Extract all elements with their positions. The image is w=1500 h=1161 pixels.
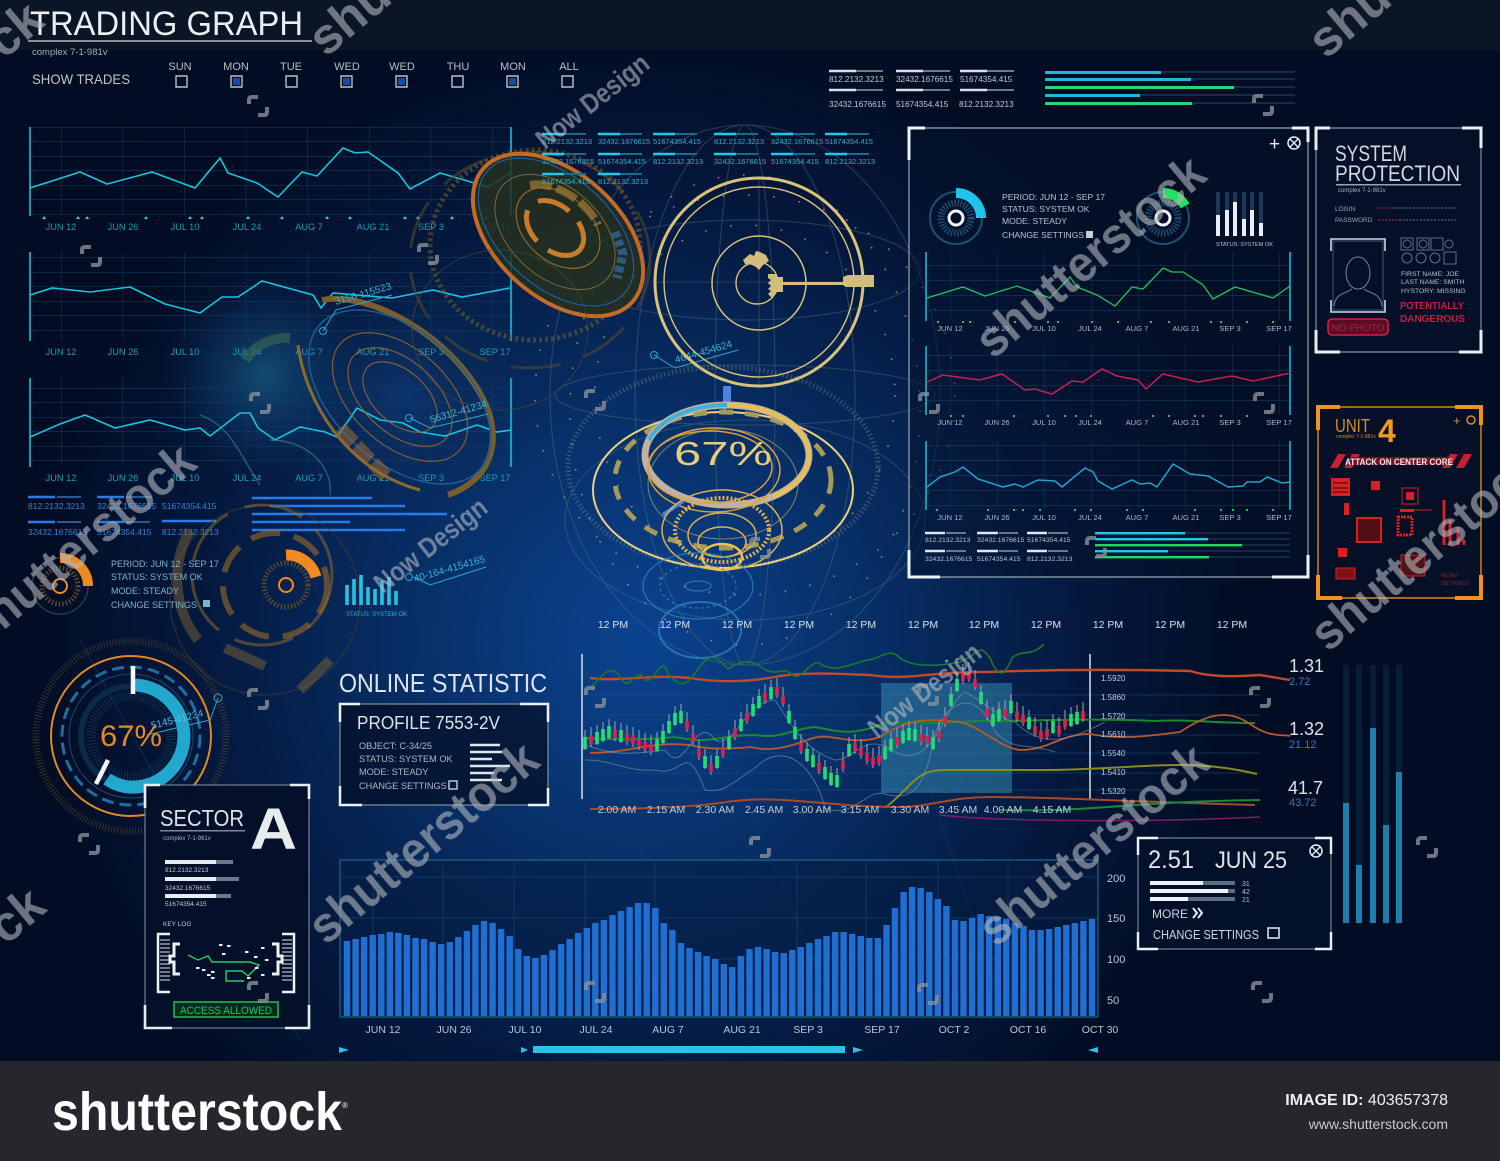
close icon [1310,845,1322,857]
date axis: JUN 12 [365,1024,401,1036]
heading [1335,141,1461,194]
red chart: JUL 10 [1032,418,1056,427]
attack banner: ATTACK ON CENTER CORE [1345,457,1453,467]
data block row: 812.2132.3213 [653,157,703,166]
reset settings: RESET [1441,573,1460,579]
profile panel: CHANGE SETTINGS [359,781,447,791]
sector bars: 51674354.415 [165,901,207,908]
line chart 2: JUN 12 [46,347,76,357]
callout labels over rings: 40-164-4154165 [413,554,487,585]
day checkboxes [168,61,579,87]
panel gauge right [1137,192,1189,244]
line chart 3: JUN 26 [108,473,138,483]
identity text: LAST NAME: SMITH [1401,279,1464,286]
moving averages [585,644,1290,821]
price labels: 1.5610 [1101,730,1126,739]
date axis: JUN 26 [436,1024,472,1036]
top right data block: 32432.1676615 [896,75,953,84]
panel status text: MODE: STEADY [1002,216,1067,226]
lower left data block: 32432.1676615 [97,501,156,511]
lower left data block: 812.2132.3213 [162,527,219,537]
time labels: 2.45 AM [745,804,783,816]
line chart 1: SEP 3 [418,222,444,232]
blue chart: AUG 21 [1172,513,1200,522]
price labels: 1.5920 [1101,674,1126,683]
right monitor panel [909,128,1308,577]
line chart 2: JUL 10 [171,347,199,357]
now design watermarks [368,47,987,744]
panel data block [925,533,1073,563]
callout labels over rings: 3156-115523 [334,281,393,308]
date axis [365,1024,1118,1036]
identity text: HYSTORY: MISSING [1401,288,1466,295]
time labels: 3.30 AM [891,804,929,816]
orange gauge left [32,558,88,614]
top right bars [1045,71,1295,105]
green candles [585,679,1077,787]
value axis [1107,873,1125,1007]
data block row: 812.2132.3213 [542,137,592,146]
red chart [926,346,1292,427]
date axis: OCT 2 [939,1024,970,1036]
blue chart: SEP 3 [1219,513,1241,522]
12 PM time axis: 12 PM [722,619,752,631]
panel mini bars [1216,192,1273,248]
line chart 2: AUG 21 [357,347,389,357]
now design watermarks: Now Design [862,636,987,744]
danger text: DANGEROUS [1400,313,1465,325]
red chart: SEP 17 [1266,418,1292,427]
now design watermarks: Now Design [530,47,655,155]
status text left: MODE: STEADY [111,586,179,596]
unit heading [1335,413,1475,449]
panel data block: 812.2132.3213 [1027,556,1073,563]
line chart 1: JUL 24 [233,222,261,232]
day checkboxes: MON [500,61,526,73]
time labels: 4.00 AM [984,804,1022,816]
vertical bars [1346,665,1399,923]
panel close icons: + [1269,134,1280,155]
attack banner [1330,454,1472,468]
line chart 1: JUL 10 [171,222,199,232]
heading: SYSTEM [1335,141,1407,166]
footer bar: ® [342,1101,348,1110]
panel data block: 51674354.415 [1027,537,1071,544]
data block row: 32432.1676615 [714,157,766,166]
no photo badge: NO PHOTO [1331,323,1385,334]
12 PM time axis: 12 PM [846,619,876,631]
green chart: JUL 10 [1032,324,1056,333]
red chart: AUG 21 [1172,418,1200,427]
unit 4 panel [1318,407,1481,598]
green chart: SEP 3 [1219,324,1241,333]
top right data block: 812.2132.3213 [959,100,1014,109]
day checkboxes: TUE [280,61,302,73]
day checkboxes: SUN [168,61,192,73]
line chart 1: SEP 17 [480,222,510,232]
line chart 1: JUN 12 [46,222,76,232]
sector bars: 812.2132.3213 [165,867,209,874]
day checkboxes: ALL [559,61,579,73]
glow behind radar rings [160,265,530,525]
red chart: JUN 12 [937,418,963,427]
date axis: JUL 24 [580,1024,613,1036]
panel bars [1095,532,1290,558]
line chart 1: AUG 7 [295,222,323,232]
sector heading: complex 7-1-981v [163,836,211,842]
icon grid [1401,238,1456,264]
unit heading: + [1453,413,1461,428]
time labels: 3.15 AM [841,804,879,816]
day checkboxes: THU [447,61,469,73]
mini bars status [346,575,407,618]
line chart 3: SEP 3 [418,473,444,483]
reflected ghost discs [643,553,753,658]
date panel: CHANGE SETTINGS [1153,928,1259,942]
date panel: MORE [1152,907,1188,921]
data block row: 51674354.415 [542,177,590,186]
data block row: 32432.1676615 [598,137,650,146]
red chart: JUL 24 [1078,418,1102,427]
line chart 2: SEP 3 [418,347,444,357]
12 PM time axis: 12 PM [598,619,628,631]
date axis: AUG 21 [723,1024,761,1036]
time labels: 3.00 AM [793,804,831,816]
data block row: 32432.1676615 [542,157,594,166]
panel data block: 51674354.415 [977,556,1021,563]
title: SHOW TRADES [32,71,130,87]
sector bars [163,860,239,928]
readouts [1288,656,1324,809]
mini bars status: STATUS: SYSTEM OK [346,612,407,618]
profile panel: OBJECT: C-34/25 [359,741,432,751]
line chart 3: AUG 21 [357,473,389,483]
readouts: 1.32 [1289,719,1324,739]
system protection panel [1316,128,1481,352]
mini progress: 31 [1242,881,1250,888]
big orange gauge [36,641,226,831]
danger text: POTENTIALLY [1400,300,1464,312]
identity text [1401,271,1466,295]
date axis: SEP 17 [864,1024,900,1036]
callout labels over rings: 56312-41234 [429,399,489,426]
date axis: OCT 30 [1082,1024,1118,1036]
identity text: FIRST NAME: JOE [1401,271,1459,278]
line chart 3: JUL 10 [171,473,199,483]
lower left data block: 32432.1676615 [28,527,87,537]
12 PM time axis: 12 PM [1217,619,1247,631]
price labels: 1.5320 [1101,787,1126,796]
readouts: 21.12 [1289,739,1317,751]
photo frame [1331,239,1385,312]
data block row: 51674354.415 [825,137,873,146]
value axis: 150 [1107,913,1125,925]
data block row: 32432.1676615 [771,137,823,146]
red chart: AUG 7 [1126,418,1148,427]
sector bars: KEY LOG [163,921,191,928]
data block row: 51674354.415 [598,157,646,166]
time labels: 3.45 AM [939,804,977,816]
unit heading: 4 [1378,413,1396,449]
status text left: CHANGE SETTINGS [111,600,197,610]
date panel [1138,838,1331,949]
status text left [111,559,219,610]
callout labels over rings [320,281,738,585]
green chart: JUN 12 [937,324,963,333]
readouts: 2.72 [1289,676,1310,688]
panel status text [1002,192,1105,240]
wicks [585,662,1083,788]
status text left: PERIOD: JUN 12 - SEP 17 [111,559,219,569]
day checkboxes: WED [389,61,415,73]
reset settings [1441,573,1469,587]
line chart 2 [30,252,512,357]
value axis: 200 [1107,873,1125,885]
orange radar ring middle [200,250,588,518]
top right data block: 51674354.415 [896,100,949,109]
date axis: SEP 3 [793,1024,823,1036]
callout labels over rings: 4644-454624 [674,339,734,366]
now design watermarks: Now Design [368,491,493,599]
watermark reticles [80,96,1436,1003]
line chart 3 [30,378,512,483]
blue chart: SEP 17 [1266,513,1292,522]
readouts: 41.7 [1288,778,1323,798]
sector heading [160,797,297,862]
login fields: PASSWORD [1335,217,1373,224]
gauge callout: 5145-41234 [150,708,205,732]
price labels: 1.5720 [1101,712,1126,721]
online statistic heading: ONLINE STATISTIC [339,668,547,698]
data block row: 812.2132.3213 [598,177,648,186]
lower left data block [28,497,219,537]
sector A panel [145,785,309,1028]
day checkboxes: WED [334,61,360,73]
line chart 1 [30,127,512,232]
12 PM time axis: 12 PM [1093,619,1123,631]
gauge percentage: 67% [100,720,162,753]
green chart: SEP 17 [1266,324,1292,333]
day checkboxes: MON [223,61,249,73]
green chart: AUG 7 [1126,324,1148,333]
price labels [1101,674,1126,796]
profile panel: MODE: STEADY [359,767,428,777]
globe wireframe [550,125,940,665]
blue bars over rings [252,498,447,530]
line chart 2: SEP 17 [480,347,510,357]
12 PM time axis: 12 PM [1031,619,1061,631]
login fields [1335,206,1456,224]
blue connector [723,386,731,413]
top right data block: 812.2132.3213 [829,75,884,84]
time labels: 2.30 AM [696,804,734,816]
line chart 3: AUG 7 [295,473,323,483]
line chart 3: JUL 24 [233,473,261,483]
candlestick chart [582,644,1290,821]
heading: complex 7-1-981v [1338,188,1386,194]
green chart [926,252,1292,333]
line chart 2: AUG 7 [295,347,323,357]
no photo badge [1328,319,1388,335]
time labels: 2.00 AM [598,804,636,816]
shutterstock watermarks: shutterstock [964,144,1216,368]
line chart 1: AUG 21 [357,222,389,232]
globe gold dust [535,175,955,645]
access allowed: ACCESS ALLOWED [180,1005,272,1017]
danger text [1400,300,1465,325]
sector bars: 32432.1676615 [165,885,211,892]
panel status text: STATUS: SYSTEM OK [1002,204,1090,214]
red chart: JUN 26 [984,418,1010,427]
status text left: STATUS: SYSTEM OK [111,572,203,582]
blue chart: JUL 24 [1078,513,1102,522]
price labels: 1.5410 [1101,768,1126,777]
value axis: 100 [1107,954,1125,966]
sector heading: SECTOR [160,805,244,831]
panel status text: PERIOD: JUN 12 - SEP 17 [1002,192,1105,202]
panel data block: 32432.1676615 [977,537,1024,544]
faint background triangles [80,640,1000,1040]
sector heading: A [250,797,297,862]
date axis: OCT 16 [1010,1024,1046,1036]
shutterstock watermarks: shutterstock [967,732,1219,956]
12 PM time axis: 12 PM [1155,619,1185,631]
green chart: JUL 24 [1078,324,1102,333]
data block row: 812.2132.3213 [714,137,764,146]
footer url: www.shutterstock.com [1308,1116,1448,1132]
scrollbar [339,1046,1098,1053]
12 PM time axis: 12 PM [784,619,814,631]
time labels: 4.15 AM [1033,804,1071,816]
panel data block: 32432.1676615 [925,556,972,563]
mini progress: 21 [1242,897,1250,904]
mini progress: 42 [1242,889,1250,896]
footer bar [0,1061,1500,1161]
12 PM time axis: 12 PM [969,619,999,631]
blue chart: JUL 10 [1032,513,1056,522]
line chart 3: SEP 17 [480,473,510,483]
orange gauge right [170,505,360,695]
panel data block: 812.2132.3213 [925,537,971,544]
heading: PROTECTION [1335,161,1460,186]
price labels: 1.5860 [1101,693,1126,702]
profile panel: STATUS: SYSTEM OK [359,754,453,764]
panel status text: CHANGE SETTINGS [1002,230,1084,240]
date panel: 2.51 [1148,846,1194,874]
blue chart: JUN 12 [937,513,963,522]
12 PM time axis: 12 PM [660,619,690,631]
title [28,5,312,87]
panel mini bars: STATUS: SYSTEM OK [1216,242,1273,248]
data block row: 812.2132.3213 [825,157,875,166]
blue chart: AUG 7 [1126,513,1148,522]
red chart: SEP 3 [1219,418,1241,427]
data block row: 51674354.415 [771,157,819,166]
date axis: JUL 10 [509,1024,542,1036]
date panel: JUN 25 [1215,847,1287,874]
red candles [591,671,1083,772]
orange radar ring upper [410,122,674,368]
unit heading: UNIT [1335,416,1370,436]
title: complex 7-1-981v [32,47,108,58]
green chart: JUN 26 [984,324,1010,333]
time labels: 2.15 AM [647,804,685,816]
bar chart [339,859,1125,1053]
lower left data block: 51674354.415 [97,527,152,537]
gold key shapes [743,251,874,298]
line chart 2: JUL 24 [233,347,261,357]
top right data block: 32432.1676615 [829,100,886,109]
panel gauge left [930,192,982,244]
shutterstock watermarks: shutterstock [297,730,549,954]
line chart 3: JUN 12 [46,473,76,483]
blue chart [926,441,1292,522]
image id: IMAGE ID: 403657378 [1285,1092,1448,1109]
green chart: AUG 21 [1172,324,1200,333]
profile panel: PROFILE 7553-2V [357,713,500,733]
unit heading: complex 7-1-981v [1336,434,1376,440]
key log [158,934,294,992]
top band [0,0,1500,50]
gold sphere circles [655,178,865,386]
top right data block: 51674354.415 [960,75,1013,84]
readouts: 1.31 [1289,656,1324,676]
12 PM time axis [598,619,1247,631]
circuit graphic [1331,478,1464,579]
12 PM time axis: 12 PM [908,619,938,631]
line chart 2: JUN 26 [108,347,138,357]
date axis: AUG 7 [652,1024,684,1036]
time labels [598,804,1071,816]
data block row [542,134,875,186]
center percentage: 67% [674,435,772,472]
readouts: 43.72 [1289,797,1317,809]
blue chart: JUN 26 [984,513,1010,522]
footer logo: shutterstock [52,1082,343,1142]
price labels: 1.5540 [1101,749,1126,758]
mini progress [1150,881,1250,904]
line chart 1: JUN 26 [108,222,138,232]
login fields: LOGIN [1335,206,1356,213]
reset settings: SETTINGS [1441,581,1469,587]
lower gold dish [568,367,878,570]
data block row: 51674354.415 [653,137,701,146]
value axis: 50 [1107,995,1119,1007]
title: TRADING GRAPH [30,5,303,43]
lower left data block: 812.2132.3213 [28,501,85,511]
profile panel [340,704,548,805]
top right data block [829,71,1014,109]
lower left data block: 51674354.415 [162,501,217,511]
